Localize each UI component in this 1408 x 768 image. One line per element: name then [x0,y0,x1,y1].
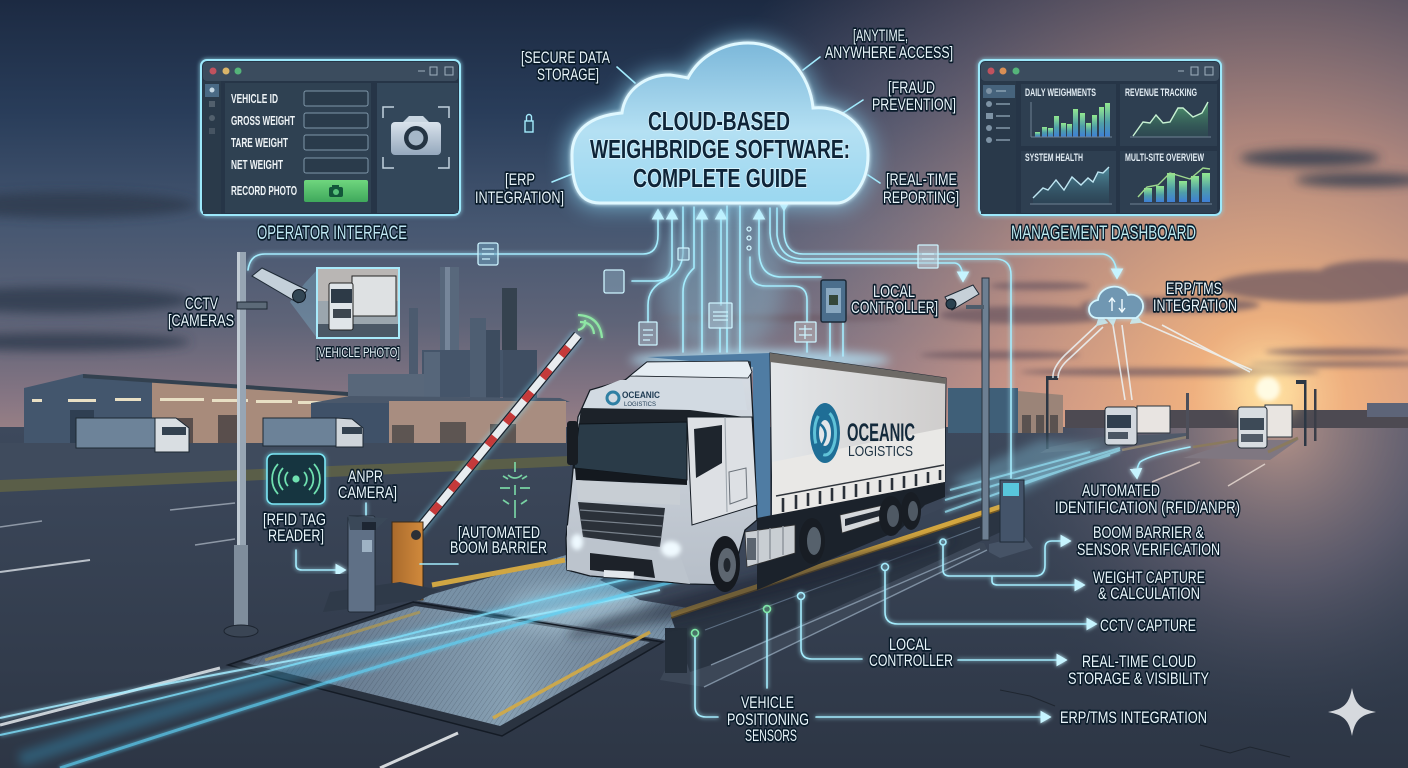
record photo button [304,180,368,202]
form fields: RECORD PHOTO [231,183,297,198]
step: boom barrier and sensor verification: BOOM BARRIER & [1093,523,1204,542]
step: real-time cloud storage and visibility: STORAGE & VISIBILITY [1068,669,1209,688]
distant warehouse [24,374,348,452]
chart: system health [1025,152,1112,204]
kiosk RFID reader [323,516,440,612]
label: secure data storage [521,48,610,84]
step: vehicle positioning sensors: VEHICLE [741,693,794,712]
step: weight capture and calculation [1093,568,1205,603]
cab logo [607,390,660,408]
arrow: cloud to dashboard [868,139,974,141]
label: automated boom barrier: BOOM BARRIER [450,538,547,557]
bumper and grille panel [576,480,680,505]
vehicle photo thumbnail [317,268,399,338]
step: ERP/TMS integration: ERP/TMS INTEGRATION [1060,708,1207,727]
icon: wifi signal at boom tip [578,315,602,338]
title: COMPLETE GUIDE [633,163,807,193]
form fields: NET WEIGHT [231,157,283,172]
label: ANPR camera: ANPR [348,467,383,486]
label: real-time reporting [883,170,959,207]
glow behind data connectors [660,202,784,358]
side mirror [567,421,578,465]
step: vehicle positioning sensors: POSITIONING [727,710,809,729]
step: CCTV capture: CCTV CAPTURE [1100,616,1196,635]
main truck: Oceanic Logistics [563,350,957,648]
label: local controller upper: LOCAL [873,282,915,301]
setting sun [1238,359,1298,419]
chart: daily weighments: DAILY WEIGHMENTS [1025,87,1096,99]
icon: padlock [525,114,533,132]
chart: multi-site overview: MULTI-SITE OVERVIEW [1125,152,1204,164]
cab logo: LOGISTICS [624,401,657,408]
background truck left [76,418,189,452]
label: real-time reporting: [REAL-TIME [886,170,957,189]
step: vehicle positioning sensors [727,693,809,745]
label: local controller upper: CONTROLLER] [851,298,938,317]
step: boom barrier and sensor verification [1077,523,1220,559]
arrow: operator interface to cloud [468,139,572,141]
form fields: GROSS WEIGHT [231,113,295,128]
chart: daily weighments [1025,87,1112,137]
label: anytime anywhere access: [ANYTIME, [853,26,908,45]
icon: camera view beam to vehicle photo [290,270,317,338]
form fields [231,91,368,198]
cloud: central title shape [572,43,868,203]
background truck middle [263,418,363,447]
label: CCTV cameras: [CAMERAS [168,311,234,330]
step: weight capture and calculation: & CALCULATION [1098,584,1200,603]
light streaks data flow [0,440,1120,768]
window controls [988,67,1213,75]
boom barrier [392,335,578,600]
fuel tank [745,525,795,567]
far weighbridge lane 2 with truck [1183,380,1316,460]
chart panels [1021,84,1217,213]
sidebar [203,81,221,214]
step: boom barrier and sensor verification: SENSOR VERIFICATION [1077,540,1220,559]
label: ERP/TMS integration: ERP/TMS [1166,279,1222,298]
heading: management dashboard: MANAGEMENT DASHBOARD [1011,223,1196,244]
title: CLOUD-BASED [648,106,790,136]
label: vehicle photo: [VEHICLE PHOTO] [316,344,400,360]
trailer logo [810,403,840,463]
cab logo: OCEANIC [622,390,660,400]
label: ERP integration: [ERP [505,170,535,189]
icon: CCTV camera left [237,268,307,309]
left CCTV pole [224,252,258,637]
label: secure data storage: STORAGE] [537,65,599,84]
chart: revenue tracking [1125,87,1211,137]
label: local controller upper [851,282,938,317]
label: RFID tag reader: READER] [268,526,324,545]
step: local controller: LOCAL [889,635,931,654]
step: local controller [869,635,953,670]
label: anytime anywhere access: ANYWHERE ACCESS] [825,43,953,62]
label: RFID tag reader [263,510,326,545]
windshield [574,422,687,480]
right CCTV pole and camera [945,278,989,540]
label: CCTV cameras [168,294,234,330]
step: automated identification: IDENTIFICATION (RFID/ANPR) [1055,498,1240,517]
label: CCTV cameras: CCTV [185,294,218,313]
step: automated identification: AUTOMATED [1082,481,1160,500]
label: ERP/TMS integration: INTEGRATION [1153,296,1237,315]
chart: multi-site overview [1125,152,1212,204]
chart: system health: SYSTEM HEALTH [1025,152,1083,164]
icon: local controller device [821,280,846,322]
trailer brand text: LOGISTICS [848,443,913,460]
background: ground and reflection [0,427,1408,768]
icon: camera with frame [383,107,449,168]
far tree line [1065,410,1408,428]
label: automated boom barrier [450,523,547,557]
step: local controller: CONTROLLER [869,651,953,670]
step: vehicle positioning sensors: SENSORS [745,726,797,745]
cab [566,361,757,585]
front wheel [710,536,740,592]
form fields: TARE WEIGHT [231,135,288,150]
panel: operator interface [201,60,460,215]
title [590,106,850,193]
trailer brand text [847,419,915,460]
label: fraud prevention: PREVENTION] [872,95,956,114]
form fields: VEHICLE ID [231,91,278,106]
label: ANPR camera: CAMERA] [338,483,397,502]
distant factory with chimneys [263,267,570,447]
distant buildings right [948,388,1408,433]
icon: sparkle watermark [1328,688,1376,736]
label: anytime anywhere access [825,26,953,62]
background: dusk sky [0,0,1408,450]
rear wheels [799,492,921,564]
connectors: process steps from bridge to labels [692,447,1190,717]
icon: ERP/TMS cloud sync [1089,287,1143,318]
connector ticks: cloud feature labels [552,57,880,183]
label: fraud prevention: [FRAUD [888,78,935,97]
door [687,417,757,525]
label: ERP integration: INTEGRATION] [475,188,564,207]
window controls [210,67,453,75]
icon: vehicle sensors green arrows [500,462,530,518]
trailer [647,353,946,520]
weighbridge deck and ramp [228,470,950,736]
step: automated identification [1055,481,1240,517]
side beam and yellow rail [432,507,1005,687]
label: ERP/TMS integration [1153,279,1237,315]
step: real-time cloud storage and visibility [1068,652,1209,688]
label: RFID tag reader: [RFID TAG [263,510,326,529]
label: secure data storage: [SECURE DATA [521,48,610,67]
connectors: cloud sync to far lanes [1053,322,1252,400]
heading: operator interface: OPERATOR INTERFACE [257,223,407,244]
connectors: cloud to site [248,206,1117,516]
trailer brand text: OCEANIC [847,419,915,447]
title: WEIGHBRIDGE SOFTWARE: [590,134,850,164]
icons on connectors [478,227,938,345]
step: real-time cloud storage and visibility: REAL-TIME CLOUD [1082,652,1196,671]
label: real-time reporting: REPORTING] [883,188,959,207]
step: weight capture and calculation: WEIGHT CAPTURE [1093,568,1205,587]
label: fraud prevention [872,78,956,114]
panel: management dashboard [979,60,1221,215]
label: ERP integration [475,170,564,207]
icon: RFID tag reader [267,454,325,504]
chart: revenue tracking: REVENUE TRACKING [1125,87,1197,99]
label: ANPR camera [338,467,397,502]
arrow: RFID to kiosk [296,550,345,570]
far weighbridge lane 1 with truck [1040,376,1189,453]
sidebar nav [981,81,1016,214]
label: automated boom barrier: [AUTOMATED [458,523,540,542]
chassis [757,482,945,590]
sunset clouds [0,149,1408,376]
doc icons [478,243,498,265]
kiosk right local controller [989,480,1033,558]
